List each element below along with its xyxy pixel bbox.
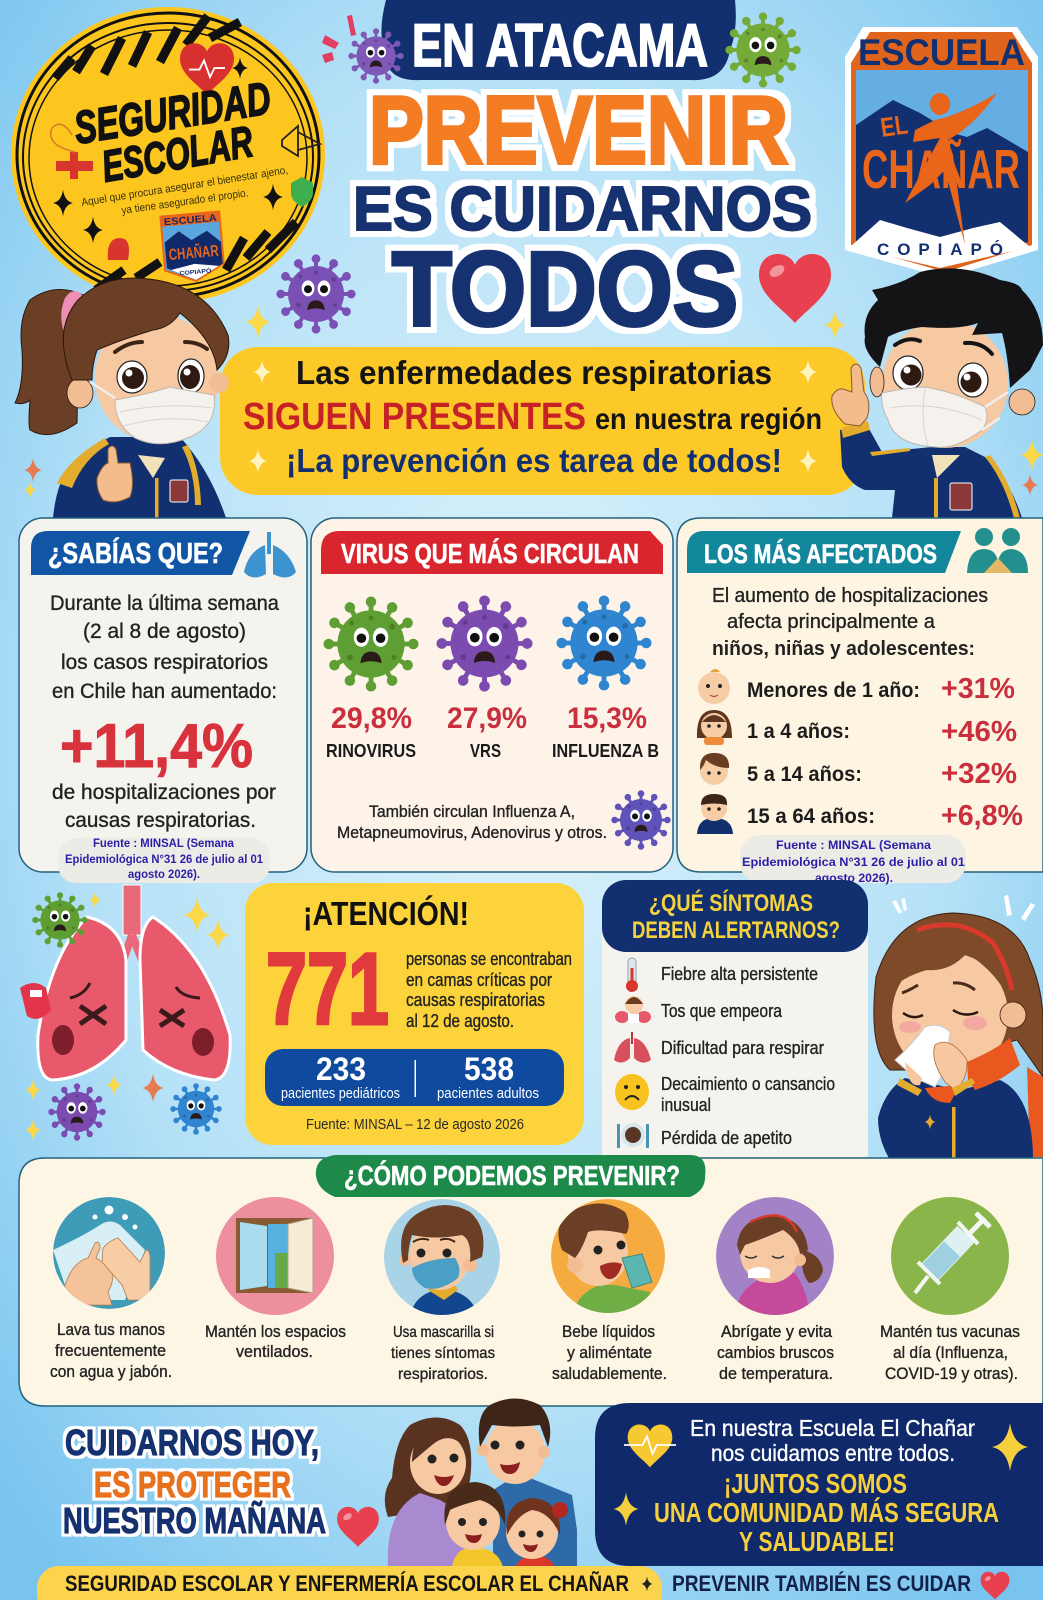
badge quote: ya tiene asegurado el propio. (121, 187, 249, 217)
icon: megaphone (282, 126, 320, 156)
boy jacket (840, 427, 1022, 518)
symptom: fiebre: Fiebre alta persistente (661, 964, 818, 984)
icon: footer heart (981, 1572, 1009, 1599)
header: sintomas (602, 880, 868, 952)
stat pill (265, 1049, 564, 1106)
text: intro: (2 al 8 de agosto) (83, 620, 246, 643)
tip: lavar manos: con agua y jabón. (50, 1362, 172, 1381)
title banner (381, 0, 736, 80)
banner line 2 (243, 396, 822, 438)
mother (385, 1418, 471, 1517)
sick girl scarf tail (1027, 1067, 1043, 1157)
icon: green virus top (725, 12, 801, 88)
text: camas criticas: personas se encontraban (406, 949, 572, 969)
small school logo: CHAÑAR (168, 240, 220, 264)
tip: ventilar: Mantén los espacios (205, 1322, 346, 1341)
character: boy with mask (832, 268, 1043, 518)
icon: siren (108, 238, 129, 260)
boy head (882, 320, 1008, 448)
text: hospitalizaciones: causas respiratorias. (65, 809, 256, 832)
stat pill: 233 (316, 1051, 366, 1087)
header: afectados: LOS MÁS AFECTADOS (704, 538, 937, 569)
text: aumento: afecta principalmente a (727, 610, 936, 633)
row: menores de 1 ano: Menores de 1 año: (747, 679, 920, 702)
big stat: 771: 771 (266, 932, 389, 1046)
header: prevenir (316, 1155, 705, 1197)
text: tambien circulan: Metapneumovirus, Adenovirus y otros. (337, 823, 607, 842)
tip: mascarilla: respiratorios. (398, 1366, 488, 1383)
row: 15 a 64 anos: 15 a 64 años: (747, 805, 875, 828)
virus: rinovirus (323, 596, 419, 761)
footer bar (37, 1566, 1009, 1600)
stat pill: pacientes adultos (437, 1086, 539, 1102)
row: 1 a 4 anos: 1 a 4 años: (747, 720, 850, 743)
text: tambien circulan: También circulan Influenza A, (369, 802, 575, 821)
boy pointing hand (832, 364, 869, 426)
symptom: apetito: Pérdida de apetito (661, 1128, 792, 1148)
badge quote: Aquel que procura asegurar el bienestar ajeno, (81, 164, 289, 209)
text: camas criticas (406, 949, 572, 1031)
badge: seguridad escolar (11, 7, 325, 303)
tip: abrigate: cambios bruscos (717, 1343, 834, 1362)
icon: medical cross (56, 152, 93, 179)
tip: vacunas: Mantén tus vacunas (880, 1322, 1020, 1341)
panel: como podemos prevenir (19, 1155, 1043, 1406)
icon: purple virus top (348, 28, 404, 84)
text: intro: Durante la última semana (50, 592, 279, 615)
panel: sabias que (19, 518, 307, 872)
icon: purple virus (276, 254, 356, 334)
text: intro: en Chile han aumentado: (52, 680, 277, 703)
banner line 2: en nuestra región (595, 403, 822, 436)
text: juntos somos: ¡JUNTOS SOMOS (724, 1468, 907, 1499)
text: aumento: niños, niñas y adolescentes: (712, 637, 975, 660)
stat pill: 538 (464, 1051, 514, 1087)
icon: people (967, 528, 1028, 573)
banner line 3: ¡La prevención es tarea de todos! (286, 442, 782, 479)
banner line 2: SIGUEN PRESENTES (243, 396, 586, 438)
tip: lavar manos: Lava tus manos (57, 1320, 165, 1339)
girl head (95, 314, 219, 442)
tip: liquidos: saludablemente. (552, 1364, 667, 1383)
source note left: Epidemiológica N°31 26 de julio al 01 (65, 854, 264, 866)
title: en atacama: EN ATACAMA (412, 12, 708, 79)
virus: influenza b: INFLUENZA B (552, 741, 659, 761)
symptom: tos (615, 996, 783, 1023)
symptom: decaimiento: inusual (661, 1095, 711, 1115)
tip: mascarilla: tienes síntomas (391, 1345, 495, 1362)
text: aumento (712, 584, 988, 660)
icon: green virus left (32, 892, 88, 948)
panel: atencion (245, 883, 584, 1145)
tip: ventilar (205, 1197, 346, 1361)
tip: abrigate (716, 1197, 834, 1383)
title: prevenir: PREVENIR (369, 77, 788, 184)
title: es cuidarnos: ES CUIDARNOS (353, 175, 812, 244)
virus: influenza b: 15,3% (567, 702, 647, 735)
icon: small virus (611, 790, 671, 850)
text: nos cuidamos: nos cuidamos entre todos. (711, 1440, 955, 1466)
header: sintomas: DEBEN ALERTARNOS? (632, 917, 840, 944)
decorative sparkles left (25, 892, 230, 1141)
text: juntos somos (654, 1468, 999, 1557)
symptom: decaimiento: Decaimiento o cansancio (661, 1074, 835, 1094)
tip: abrigate: de temperatura. (719, 1364, 833, 1383)
sick girl hair back (874, 913, 1043, 1077)
tip: abrigate: Abrígate y evita (721, 1322, 833, 1341)
icon: heart pulse (624, 1425, 676, 1467)
panel: sintomas (602, 880, 868, 1158)
row: 5 a 14 anos: 5 a 14 años: (747, 763, 862, 786)
tip: vacunas (880, 1197, 1020, 1383)
row: 1 a 4 anos (697, 710, 1017, 748)
symptom: decaimiento (615, 1074, 835, 1115)
panel: mensaje escuela (595, 1403, 1043, 1566)
tip: mascarilla (384, 1199, 500, 1383)
girl mask (115, 387, 214, 444)
girl jacket (53, 437, 226, 518)
closing slogan: CUIDARNOS HOY, (65, 1422, 319, 1463)
closing slogan (63, 1422, 326, 1541)
girl thumbs up hand (97, 446, 132, 502)
symptom: dificultad (614, 1032, 824, 1063)
panel: los mas afectados (677, 518, 1043, 872)
virus: influenza b (552, 595, 659, 761)
row: menores de 1 ano (698, 669, 1015, 705)
row: 15 a 64 anos: +6,8% (941, 800, 1023, 832)
tip: vacunas: COVID-19 y otras). (885, 1364, 1018, 1383)
icon: shield check (291, 177, 313, 207)
sick girl tissue (895, 1025, 950, 1087)
logo runner figure (905, 93, 997, 245)
virus: rinovirus: 29,8% (331, 702, 412, 735)
icon: blue lungs (244, 532, 296, 578)
badge title (70, 72, 274, 192)
stat pill: pacientes pediátricos (281, 1086, 400, 1102)
icon: heart (759, 254, 831, 323)
text: intro: los casos respiratorios (61, 651, 268, 674)
tip: vacunas: al día (Influenza, (893, 1343, 1008, 1362)
tip: liquidos (551, 1199, 667, 1383)
badge title: SEGURIDAD (70, 72, 274, 154)
tip: liquidos: Bebe líquidos (562, 1322, 655, 1341)
text: juntos somos: Y SALUDABLE! (739, 1526, 895, 1557)
badge title: ESCOLAR (98, 117, 257, 192)
character: girl with mask (15, 278, 229, 518)
text: hospitalizaciones (52, 781, 276, 832)
banner line 1: Las enfermedades respiratorias (296, 354, 772, 391)
header: virus: VIRUS QUE MÁS CIRCULAN (341, 538, 639, 569)
text: nos cuidamos: En nuestra Escuela El Chañar (690, 1415, 975, 1441)
icon: heart slogan (337, 1507, 379, 1547)
header: sintomas: ¿QUÉ SÍNTOMAS (649, 889, 813, 917)
text: nos cuidamos (690, 1415, 975, 1466)
header: virus (321, 531, 663, 574)
source note left: agosto 2026). (128, 869, 200, 881)
small school logo (160, 211, 225, 283)
header: prevenir: ¿CÓMO PODEMOS PREVENIR? (344, 1160, 680, 1191)
header: sabias que: ¿SABÍAS QUE? (48, 536, 223, 570)
tip: liquidos: y aliméntate (567, 1343, 652, 1362)
symptom: dificultad: Dificultad para respirar (661, 1038, 824, 1058)
row: 15 a 64 anos (697, 794, 1023, 834)
small school logo: ESCUELA (163, 213, 217, 228)
footer text left: SEGURIDAD ESCOLAR Y ENFERMERÍA ESCOLAR EL CHAÑAR (65, 1571, 629, 1596)
icon: blue virus left (170, 1083, 222, 1135)
tip: ventilar: ventilados. (236, 1342, 313, 1361)
symptom: tos: Tos que empeora (661, 1001, 783, 1021)
tip: lavar manos: frecuentemente (55, 1341, 166, 1360)
closing slogan: ES PROTEGER (94, 1464, 291, 1505)
logo text: ESCUELA (858, 32, 1025, 73)
source note right: Epidemiológica N°31 26 de julio al 01 (742, 855, 965, 869)
footer text right: PREVENIR TAMBIÉN ES CUIDAR (672, 1571, 971, 1596)
decorative sneeze marks (892, 895, 1035, 921)
sick girl scarf (925, 1038, 1020, 1103)
virus: vrs (436, 595, 533, 761)
sick girl hands (934, 1042, 967, 1090)
virus: rinovirus: RINOVIRUS (326, 741, 416, 761)
text: camas criticas: causas respiratorias (406, 990, 545, 1010)
virus: vrs: 27,9% (447, 702, 527, 735)
school shield logo: EL (879, 109, 910, 143)
child two (515, 1555, 555, 1567)
source note right (740, 835, 966, 885)
source note left (58, 838, 270, 883)
text: hospitalizaciones: de hospitalizaciones por (52, 781, 276, 804)
title: todos: TODOS (392, 231, 738, 348)
tip: mascarilla: Usa mascarilla si (393, 1324, 494, 1341)
text: intro (50, 592, 279, 703)
big stat: +11,4%: +11,4% (60, 712, 253, 781)
row: 5 a 14 anos: +32% (941, 758, 1017, 790)
child one (452, 1547, 503, 1567)
character: sick girl (874, 913, 1043, 1160)
symptom: apetito (617, 1123, 792, 1148)
father (493, 1478, 577, 1567)
row: 5 a 14 anos (700, 753, 1017, 790)
source note right: Fuente : MINSAL (Semana (776, 838, 931, 852)
girl ponytail (15, 290, 83, 435)
sick girl jacket (878, 1078, 1033, 1160)
school shield logo: COPIAPÓ (877, 240, 1003, 259)
panel: virus que mas circulan (311, 518, 673, 872)
text: camas criticas: en camas críticas por (406, 970, 552, 990)
source note right: agosto 2026). (815, 871, 893, 885)
text: camas criticas: al 12 de agosto. (406, 1011, 514, 1031)
row: 1 a 4 anos: +46% (941, 716, 1017, 748)
sick girl face (892, 953, 1008, 1077)
atencion heading: ¡ATENCIÓN! (303, 895, 469, 932)
icon: purple virus left (48, 1083, 106, 1141)
row: menores de 1 ano: +31% (941, 673, 1015, 705)
header: sabias que (31, 531, 250, 575)
text: tambien circulan (337, 802, 607, 842)
text: aumento: El aumento de hospitalizaciones (712, 584, 988, 607)
closing slogan: NUESTRO MAÑANA (63, 1499, 326, 1541)
school shield logo (845, 27, 1038, 278)
header: afectados (687, 531, 961, 573)
symptom: fiebre (626, 958, 818, 992)
virus: vrs: VRS (470, 741, 501, 761)
yellow message banner (220, 347, 865, 495)
illustration: family (385, 1398, 577, 1567)
boy mask (882, 387, 987, 447)
icon: heart with pulse (180, 43, 234, 95)
source note left: Fuente : MINSAL (Semana (93, 838, 235, 850)
decorative burst (322, 15, 356, 63)
tip: lavar manos (50, 1197, 172, 1381)
illustration: sick lungs (20, 885, 230, 1080)
small school logo: COPIAPÓ (179, 266, 212, 277)
decorative sparkles (245, 305, 1043, 471)
source: minsal: Fuente: MINSAL – 12 de agosto 2026 (306, 1117, 524, 1133)
